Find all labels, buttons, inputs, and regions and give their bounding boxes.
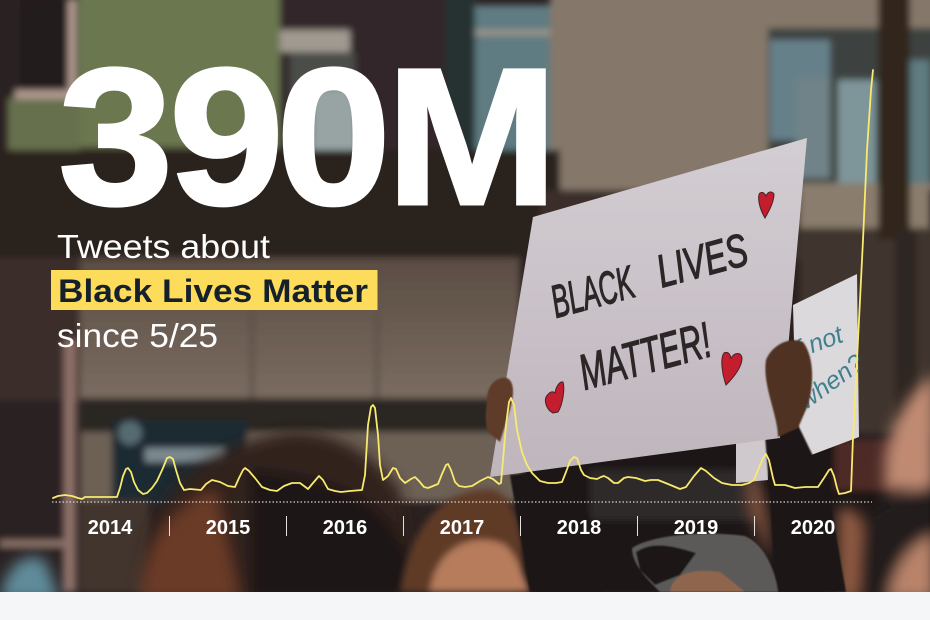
curly-haired person — [400, 490, 522, 592]
year labels: 2014 — [88, 517, 133, 539]
small sign behind: f not — [791, 320, 848, 364]
year labels — [88, 517, 835, 539]
year labels: 2017 — [440, 517, 484, 539]
text: tweets about: Tweets about — [57, 228, 270, 265]
sign handwriting: MATTER! — [573, 312, 717, 401]
tree trunk — [878, 0, 910, 240]
hearts — [545, 192, 774, 413]
small sign behind: when? — [793, 349, 869, 415]
year labels: 2018 — [557, 517, 601, 539]
sign handwriting: LIVES — [651, 223, 753, 297]
building upper wall — [550, 0, 930, 190]
right window — [768, 28, 930, 185]
arms and people in front — [510, 425, 846, 592]
main protest sign — [490, 138, 807, 477]
taupe lower wall — [80, 258, 520, 398]
year labels: 2016 — [323, 517, 367, 539]
chart: tweet volume line — [52, 70, 873, 502]
crowd blurred heads — [140, 432, 420, 600]
chart baseline — [52, 501, 872, 503]
year labels: 2020 — [791, 517, 835, 539]
text: since date: since 5/25 — [57, 317, 218, 354]
dark band — [8, 146, 564, 195]
small sign behind — [736, 274, 869, 483]
headline number: 390M — [58, 27, 558, 246]
highlighted phrase: Black Lives Matter — [58, 273, 368, 309]
sign handwriting: BLACK — [545, 255, 641, 328]
hands holding sign — [486, 340, 812, 442]
year axis — [88, 516, 835, 539]
trend line — [53, 70, 873, 499]
bottom strip — [0, 592, 930, 620]
storefront — [78, 396, 487, 432]
year labels: 2019 — [674, 517, 718, 539]
sign handwriting — [552, 234, 748, 390]
year labels: 2015 — [206, 517, 250, 539]
